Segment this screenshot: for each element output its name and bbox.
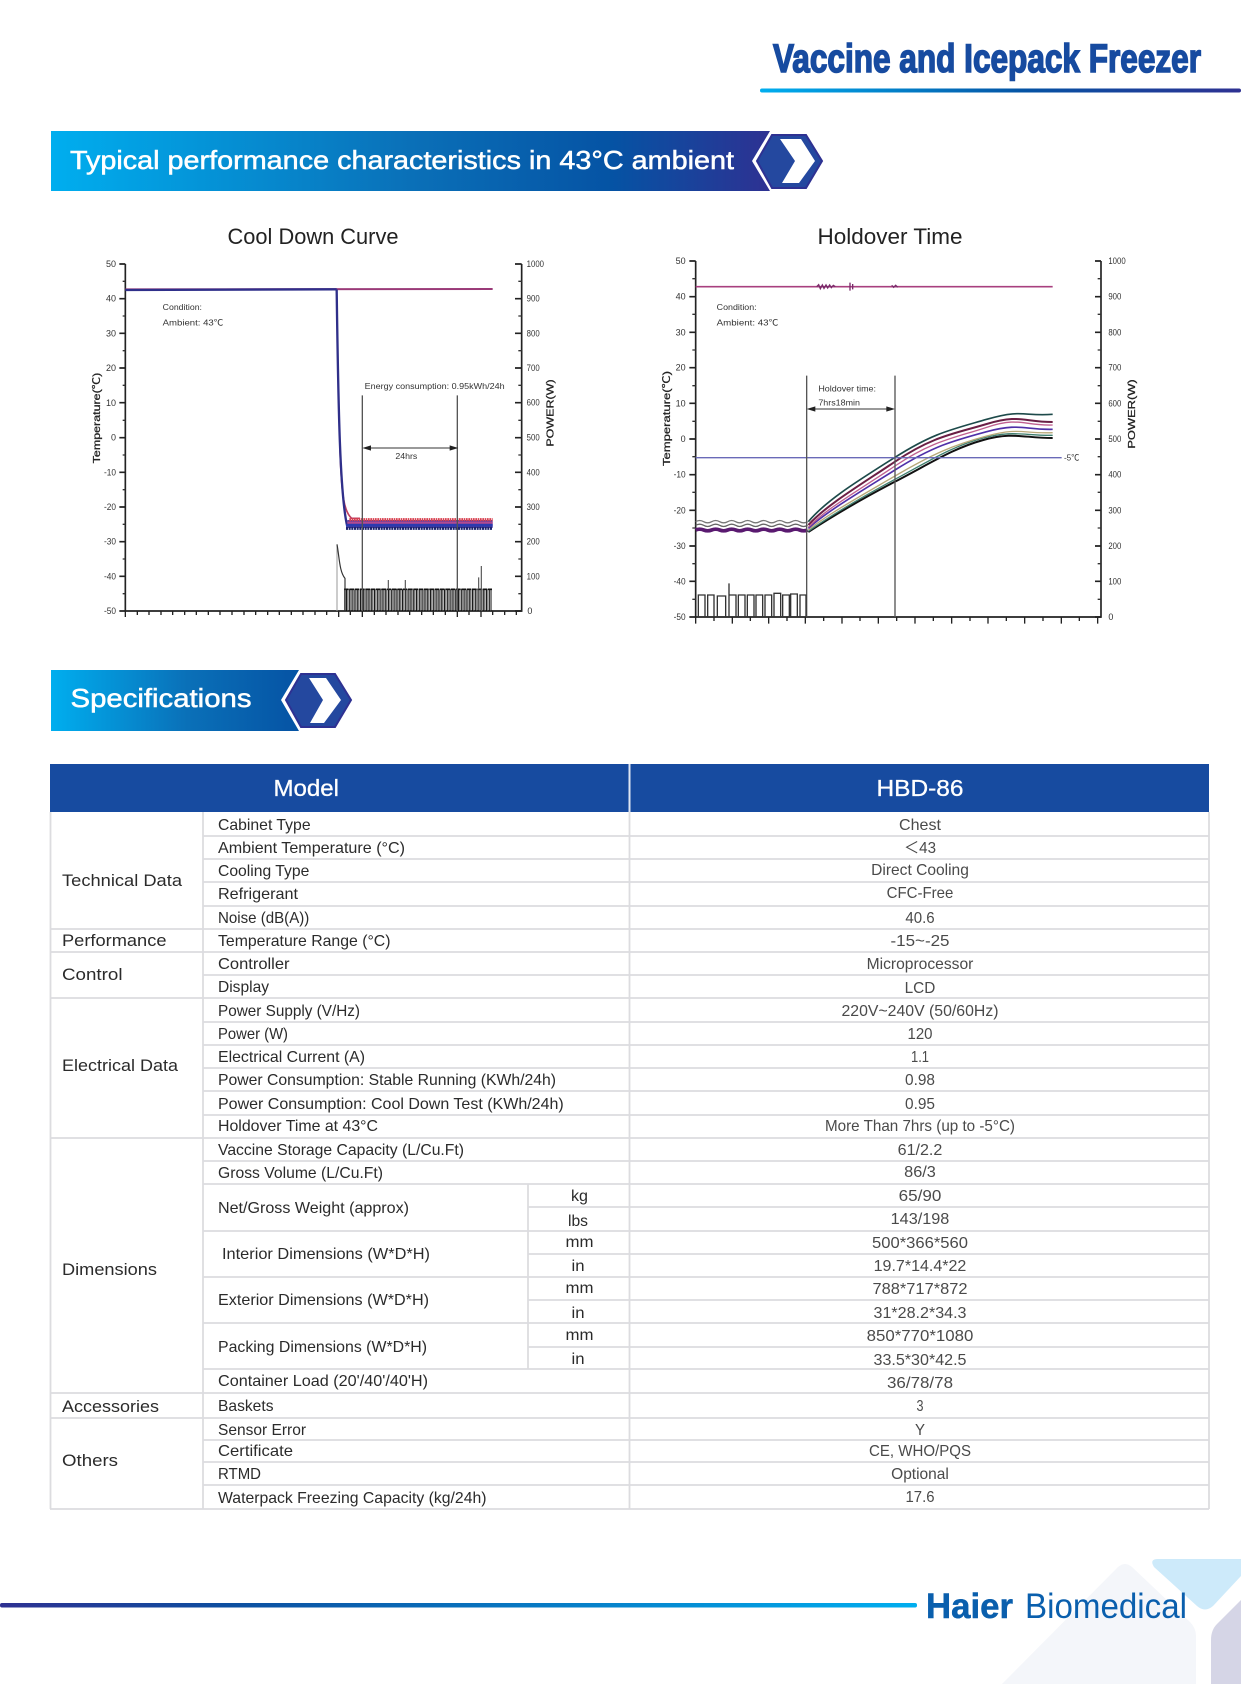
- unit labels: lbs: [568, 1213, 588, 1230]
- chart: cool down curve: 200: [527, 537, 540, 547]
- chart: holdover time: -50: [674, 612, 686, 622]
- chart: cool down curve: 40: [106, 294, 116, 304]
- chart: cool down curve: 30: [106, 328, 116, 338]
- parameter labels: Certificate: [218, 1443, 293, 1460]
- chart: holdover time: 200: [1108, 541, 1121, 551]
- parameter labels: Display: [218, 979, 269, 996]
- parameter labels: Controller: [218, 956, 290, 973]
- chart: holdover time: 0: [681, 434, 686, 444]
- category labels: Performance: [62, 931, 166, 950]
- chart: holdover time: Temperature(℃): [662, 371, 673, 466]
- parameter labels: Refrigerant: [218, 886, 299, 903]
- chart: cool down curve: 100: [527, 571, 540, 581]
- parameter labels: Power Consumption: Cool Down Test (KWh/24h): [218, 1096, 564, 1113]
- HBD-86 values: Y: [915, 1422, 925, 1439]
- HBD-86 values: [825, 817, 1015, 1506]
- parameter labels: Sensor Error: [218, 1422, 307, 1439]
- HBD-86 values: 220V~240V (50/60Hz): [842, 1003, 998, 1020]
- table header: Model: [274, 775, 339, 801]
- parameter labels: Vaccine Storage Capacity (L/Cu.Ft): [218, 1142, 464, 1159]
- chart: holdover time: 0: [1108, 612, 1113, 622]
- chart: cool down curve: 1000: [527, 259, 544, 269]
- HBD-86 values: More Than 7hrs (up to -5°C): [825, 1118, 1015, 1135]
- category labels: Electrical Data: [62, 1056, 179, 1075]
- section banner: performance characteristics: [51, 131, 822, 191]
- HBD-86 values: 65/90: [899, 1188, 941, 1205]
- chart: holdover time: 400: [1108, 470, 1121, 480]
- parameter labels: Net/Gross Weight (approx): [218, 1200, 409, 1217]
- chart: holdover time: 600: [1108, 398, 1121, 408]
- HBD-86 values: -15~-25: [890, 933, 950, 950]
- unit labels: mm: [566, 1327, 594, 1344]
- chart: cool down curve: 800: [527, 328, 540, 338]
- chart: cool down curve: -20: [104, 502, 116, 512]
- chart: cool down curve: 500: [527, 433, 540, 443]
- table header: [50, 764, 1209, 812]
- chart: cool down curve: 20: [106, 363, 116, 373]
- chart: cool down curve: POWER(W): [545, 379, 556, 447]
- section banner: specifications: [51, 670, 351, 731]
- chart: cool down curve: Ambient: 43℃: [163, 317, 224, 327]
- chart: cool down curve: 600: [527, 398, 540, 408]
- chart: cool down curve: 24hrs: [395, 451, 418, 461]
- unit labels: in: [572, 1258, 584, 1275]
- parameter labels: Temperature Range (°C): [218, 933, 390, 950]
- HBD-86 values: 1.1: [911, 1049, 929, 1066]
- chart: holdover time: 800: [1108, 327, 1121, 337]
- category labels: [62, 871, 183, 1470]
- HBD-86 values: 36/78/78: [887, 1375, 953, 1392]
- chart: holdover time: 900: [1108, 292, 1121, 302]
- chart: holdover time: [662, 224, 1138, 624]
- chart: cool down curve: -50: [104, 606, 116, 616]
- unit labels: mm: [566, 1234, 594, 1251]
- category labels: Control: [62, 965, 122, 984]
- logo: Haier Biomedical: Haier: [926, 1587, 1013, 1626]
- HBD-86 values: CE, WHO/PQS: [869, 1443, 971, 1460]
- parameter labels: Interior Dimensions (W*D*H): [222, 1246, 430, 1263]
- chart: holdover time: Ambient: 43℃: [717, 318, 779, 328]
- chart: holdover time: -30: [674, 541, 686, 551]
- unit labels: mm: [566, 1280, 594, 1297]
- logo: Haier Biomedical: Biomedical: [1025, 1587, 1187, 1626]
- HBD-86 values: 33.5*30*42.5: [874, 1352, 967, 1369]
- HBD-86 values: Optional: [891, 1466, 949, 1483]
- parameter labels: Power Consumption: Stable Running (KWh/24h): [218, 1072, 556, 1089]
- parameter labels: Gross Volume (L/Cu.Ft): [218, 1165, 383, 1182]
- chart: cool down curve: 400: [527, 467, 540, 477]
- parameter labels: Holdover Time at 43°C: [218, 1118, 378, 1135]
- category labels: Technical Data: [62, 871, 183, 890]
- chart: holdover time: 700: [1108, 363, 1121, 373]
- parameter labels: Electrical Current (A): [218, 1049, 365, 1066]
- footer line: [0, 1603, 917, 1608]
- chart: holdover time: 50: [676, 256, 686, 266]
- unit labels: in: [572, 1305, 584, 1322]
- chart: cool down curve: -10: [104, 467, 116, 477]
- HBD-86 values: 143/198: [891, 1211, 949, 1228]
- chart: cool down curve: Energy consumption: 0.95kWh/24h: [365, 381, 505, 391]
- parameter labels: RTMD: [218, 1466, 261, 1483]
- HBD-86 values: 120: [908, 1026, 933, 1043]
- chart: holdover time: -40: [674, 576, 686, 586]
- footer background shapes: [1002, 1559, 1241, 1684]
- HBD-86 values: 40.6: [905, 910, 935, 927]
- chart: cool down curve: -40: [104, 571, 116, 581]
- chart: holdover time: 500: [1108, 434, 1121, 444]
- chart: holdover time: 7hrs18min: [818, 398, 860, 408]
- chart: holdover time: Holdover time:: [818, 384, 876, 394]
- unit labels: in: [572, 1351, 584, 1368]
- chart: holdover time: 1000: [1108, 256, 1126, 266]
- category labels: Others: [62, 1451, 118, 1470]
- chart: cool down curve: Condition:: [163, 302, 202, 312]
- chart: holdover time: 40: [676, 292, 686, 302]
- parameter labels: Power (W): [218, 1026, 288, 1043]
- HBD-86 values: 61/2.2: [898, 1142, 942, 1159]
- HBD-86 values: ＜43: [904, 840, 936, 857]
- HBD-86 values: Chest: [899, 817, 942, 834]
- chart: holdover time: POWER(W): [1127, 379, 1138, 449]
- chart: holdover time: 20: [676, 363, 686, 373]
- HBD-86 values: Direct Cooling: [871, 862, 969, 879]
- HBD-86 values: 19.7*14.4*22: [874, 1258, 966, 1275]
- category labels: Accessories: [62, 1397, 159, 1416]
- HBD-86 values: 17.6: [906, 1489, 935, 1506]
- HBD-86 values: LCD: [905, 980, 935, 997]
- chart: cool down curve: [92, 224, 556, 617]
- HBD-86 values: 0.95: [905, 1096, 935, 1113]
- HBD-86 values: 3: [916, 1398, 924, 1415]
- parameter labels: Packing Dimensions (W*D*H): [218, 1339, 427, 1356]
- HBD-86 values: 31*28.2*34.3: [874, 1305, 967, 1322]
- chart: cool down curve: 700: [527, 363, 540, 373]
- HBD-86 values: Microprocessor: [867, 956, 974, 973]
- section banner: performance characteristics: Typical performance characteristics in 43°C ambient: [70, 145, 735, 175]
- parameter labels: Ambient Temperature (°C): [218, 840, 405, 857]
- parameter labels: Waterpack Freezing Capacity (kg/24h): [218, 1490, 486, 1507]
- logo: Haier Biomedical: [926, 1587, 1187, 1626]
- chart: cool down curve: 10: [106, 398, 116, 408]
- category labels: Dimensions: [62, 1260, 157, 1279]
- HBD-86 values: 788*717*872: [872, 1281, 968, 1298]
- HBD-86 values: 500*366*560: [872, 1235, 968, 1252]
- chart: holdover time: -5℃: [1064, 453, 1080, 463]
- parameter labels: Noise (dB(A)): [218, 910, 309, 927]
- parameter labels: Container Load (20'/40'/40'H): [218, 1373, 428, 1390]
- parameter labels: Power Supply (V/Hz): [218, 1003, 360, 1020]
- chart: cool down curve: Temperature(℃): [92, 373, 103, 463]
- parameter labels: Cooling Type: [218, 863, 309, 880]
- chart: holdover time: Condition:: [717, 302, 757, 312]
- unit labels: kg: [571, 1188, 588, 1205]
- chart: cool down curve: -30: [104, 537, 116, 547]
- specifications table: [50, 764, 1209, 1509]
- parameter labels: Exterior Dimensions (W*D*H): [218, 1292, 429, 1309]
- section banner: specifications: Specifications: [70, 683, 252, 713]
- chart: cool down curve: 900: [527, 294, 540, 304]
- chart: cool down curve: 0: [111, 433, 116, 443]
- parameter labels: Baskets: [218, 1398, 274, 1415]
- chart: cool down curve: 300: [527, 502, 540, 512]
- chart: holdover time: -20: [674, 505, 686, 515]
- chart: holdover time: 300: [1108, 505, 1121, 515]
- chart: cool down curve: Cool Down Curve: [228, 224, 398, 249]
- chart: holdover time: 100: [1108, 576, 1121, 586]
- chart: holdover time: 30: [676, 327, 686, 337]
- HBD-86 values: CFC-Free: [887, 885, 953, 902]
- chart: cool down curve: 50: [106, 259, 116, 269]
- HBD-86 values: 0.98: [905, 1072, 935, 1089]
- chart: holdover time: Holdover Time: [818, 224, 962, 249]
- table header: HBD-86: [876, 775, 964, 801]
- chart: holdover time: -10: [674, 470, 686, 480]
- table grid: [50, 812, 1209, 1509]
- chart: holdover time: 10: [676, 398, 686, 408]
- HBD-86 values: 86/3: [904, 1164, 936, 1181]
- parameter labels: [218, 817, 564, 1507]
- unit labels: [566, 1188, 594, 1368]
- parameter labels: Cabinet Type: [218, 817, 311, 834]
- chart: cool down curve: 0: [527, 606, 532, 616]
- HBD-86 values: 850*770*1080: [867, 1328, 973, 1345]
